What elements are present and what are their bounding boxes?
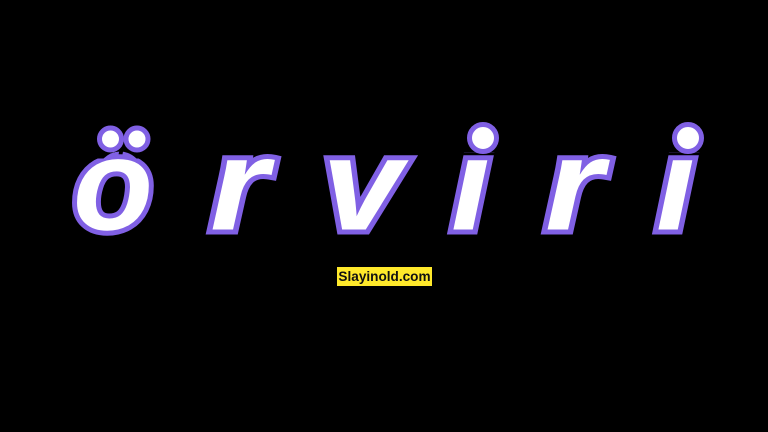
title: letter-spaced word orviri <box>72 122 704 236</box>
website label: Slayinold.com <box>338 269 431 284</box>
letter v: v <box>322 112 409 258</box>
letter i: i <box>451 111 494 257</box>
letter i: i <box>656 111 699 257</box>
letter i <box>446 122 499 234</box>
letter o with umlaut: ö <box>73 110 153 258</box>
letter r: r <box>210 111 276 257</box>
letter r: r <box>545 111 611 257</box>
letter i <box>652 122 704 234</box>
